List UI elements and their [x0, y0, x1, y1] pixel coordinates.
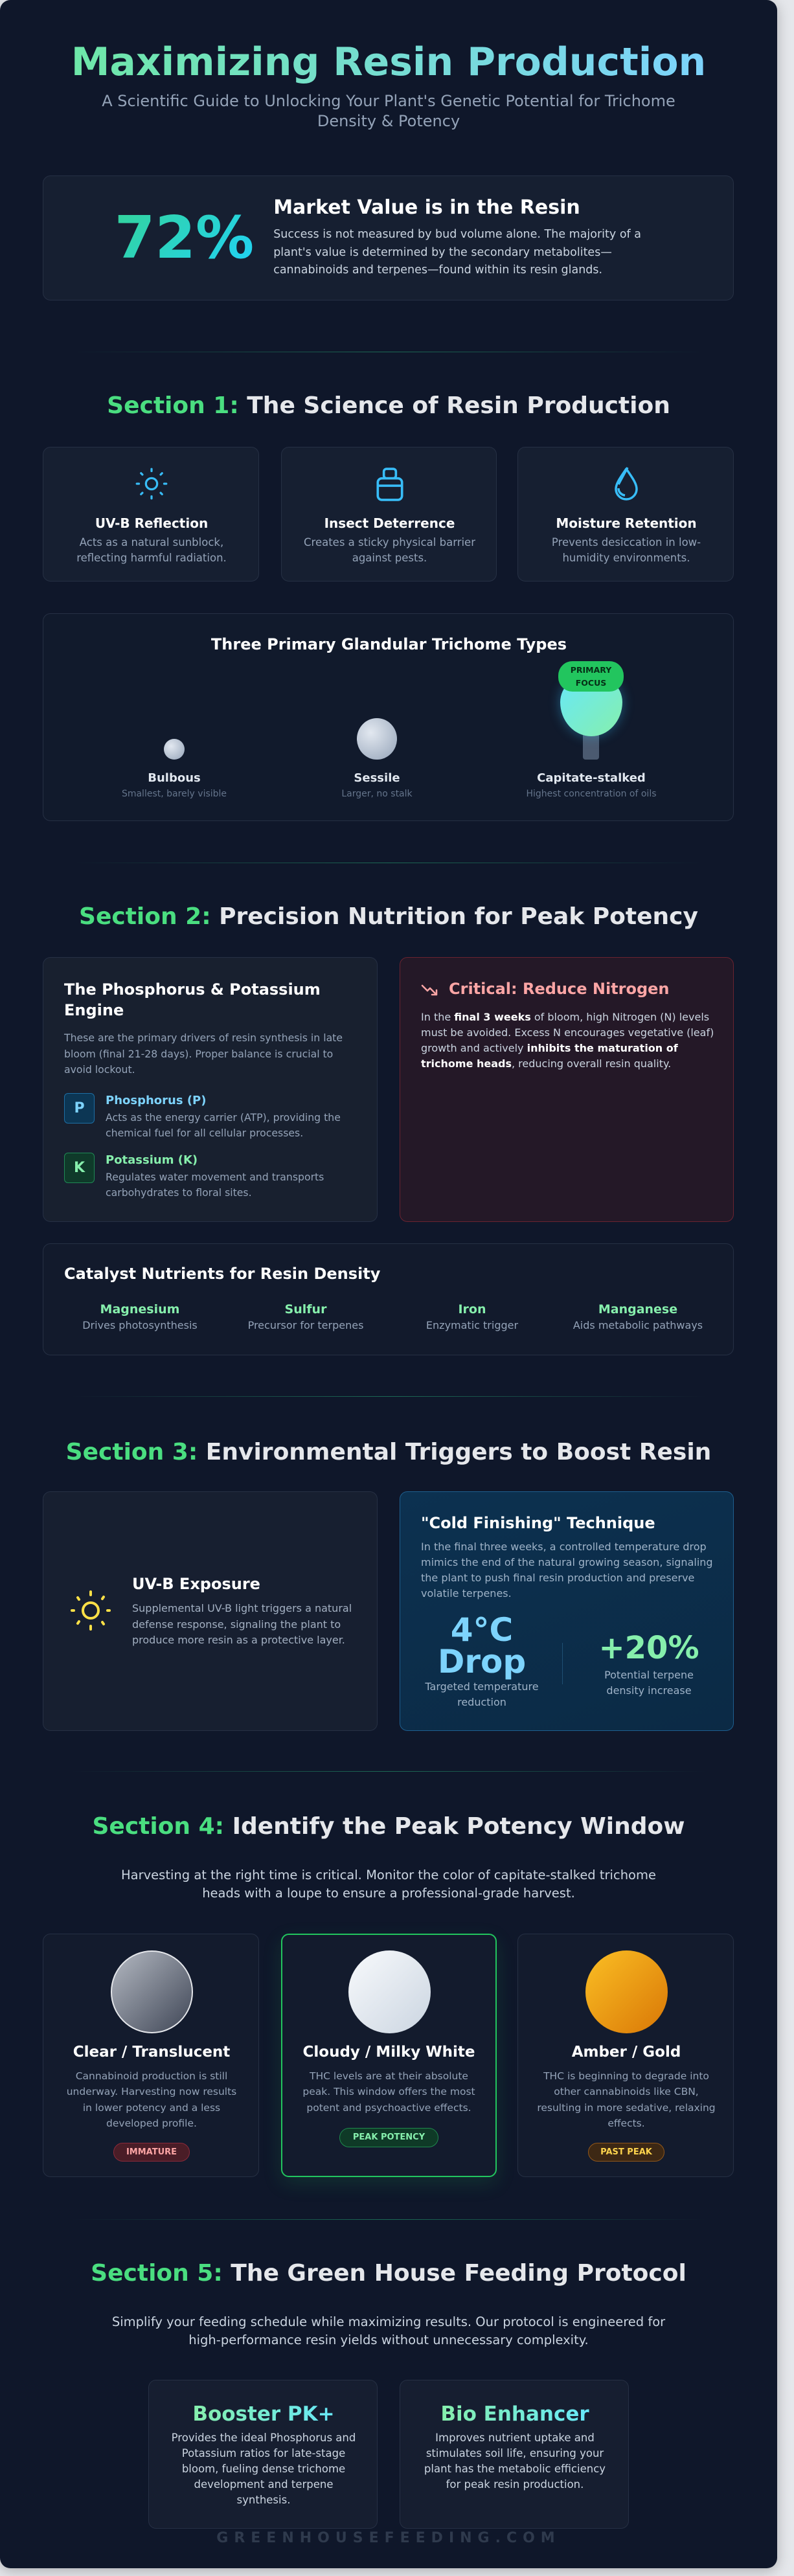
stat: +20%: Potential terpene density increase	[604, 1669, 694, 1697]
nutrient: potassium: Regulates water movement and transports carbohydrates to floral sites.	[106, 1171, 324, 1199]
nutrient: magnesium: Drives photosynthesis	[82, 1319, 198, 1331]
badge: primary focus: PRIMARY	[571, 665, 611, 675]
card: clear: Cannabinoid production is still underway. Harvesting now results in lower potency and a less developed profile.	[67, 2070, 236, 2129]
nutrient: sulfur: Precursor for terpenes	[248, 1319, 363, 1331]
heading: section 5: Section 5: The Green House Feeding Protocol	[91, 2260, 686, 2287]
badge: peak potency: PEAK POTENCY	[353, 2132, 425, 2142]
badge: primary focus: FOCUS	[576, 678, 606, 688]
badge: past peak: PAST PEAK	[600, 2147, 652, 2157]
stat: 72%: 72%	[115, 203, 254, 272]
card: UV-B reflection: UV-B Reflection	[95, 515, 208, 531]
stat: 4°C drop: Drop	[438, 1643, 526, 1680]
nutrient: sulfur: Sulfur	[285, 1302, 326, 1316]
heading: section 1: Section 1: The Science of Resin Production	[107, 392, 670, 419]
card: bio enhancer: Bio Enhancer	[440, 2402, 589, 2426]
trichome: sessile	[341, 718, 413, 799]
card: cloudy	[281, 1934, 497, 2177]
nutrient: iron: Enzymatic trigger	[426, 1319, 518, 1331]
panel: catalyst nutrients	[43, 1243, 734, 1355]
nutrient: iron: Iron	[458, 1302, 486, 1316]
nutrient: manganese: Manganese	[598, 1302, 677, 1316]
nutrient: phosphorus	[64, 1093, 341, 1139]
nutrient: manganese	[573, 1302, 703, 1331]
panel: trichome types	[43, 613, 734, 821]
icon: cloudy trichome	[348, 1950, 431, 2033]
panel: reduce nitrogen	[400, 957, 734, 1222]
nutrient: magnesium: Magnesium	[100, 1302, 179, 1316]
hero stat card	[43, 175, 734, 300]
card: amber: THC is beginning to degrade into other cannabinoids like CBN, resulting in more sedative, relaxing effects.	[537, 2070, 716, 2129]
intro text section 5: Simplify your feeding schedule while maximizing results. Our protocol is engineered for high-performance resin yields without unnecessary complexity.	[112, 2314, 665, 2347]
nutrient: iron	[426, 1302, 518, 1331]
card: moisture retention	[517, 447, 734, 582]
card: insect deterrence: Creates a sticky physical barrier against pests.	[304, 536, 475, 564]
trichome: sessile: Sessile	[354, 771, 400, 785]
heading: section 4: Section 4: Identify the Peak Potency Window	[92, 1813, 685, 1840]
trichome heading: Three Primary Glandular Trichome Types	[211, 635, 567, 653]
icon: sun	[136, 468, 167, 500]
intro text section 4: Harvesting at the right time is critical. Monitor the color of capitate-stalked trichome heads with a loupe to ensure a professional-grade harvest.	[121, 1868, 656, 1901]
trichome: bulbous: Bulbous	[148, 771, 201, 785]
nutrient: manganese: Aids metabolic pathways	[573, 1319, 703, 1331]
title: Maximizing Resin Production	[71, 40, 706, 85]
card: amber: Amber / Gold	[572, 2044, 681, 2061]
icon: jar	[377, 468, 403, 501]
hero text	[273, 196, 641, 277]
panel: cold finishing	[400, 1491, 734, 1731]
panel: cold finishing: In the final three weeks, a controlled temperature drop mimics the end of the natural growing season, signaling the plant to push final resin production and preserve volatile terpenes.	[421, 1541, 713, 1599]
panel: UV-B exposure	[43, 1491, 378, 1731]
card: UV-B reflection	[43, 447, 259, 582]
badge: immature: IMMATURE	[126, 2147, 177, 2157]
panel: cold finishing: "Cold Finishing" Technique	[421, 1514, 655, 1532]
badge: peak potency	[339, 2128, 438, 2147]
badge: immature	[113, 2143, 190, 2162]
card: insect deterrence: Insect Deterrence	[324, 515, 455, 531]
icon: trending down	[421, 984, 438, 996]
card: booster PK+: Booster PK+	[192, 2402, 335, 2426]
card: bio enhancer	[400, 2380, 629, 2529]
card: cloudy: THC levels are at their absolute peak. This window offers the most potent and psychoactive effects.	[302, 2070, 475, 2114]
hero text: Success is not measured by bud volume alone. The majority of a plant's value is determined by the secondary metabolites—cannabinoids and terpenes—found within its resin glands.	[273, 228, 641, 277]
trichome: capitate-stalked	[526, 661, 657, 799]
icon: sun yellow	[71, 1590, 111, 1631]
trichome: bulbous	[122, 739, 227, 799]
card: moisture retention: Prevents desiccation in low-humidity environments.	[552, 536, 701, 564]
panel: UV-B exposure: UV-B Exposure	[132, 1575, 260, 1593]
heading: section 3: Section 3: Environmental Triggers to Boost Resin	[66, 1439, 711, 1465]
panel: catalyst nutrients: Catalyst Nutrients for Resin Density	[64, 1265, 380, 1283]
card: UV-B reflection: Acts as a natural sunblock, reflecting harmful radiation.	[76, 536, 227, 564]
nutrient: sulfur	[248, 1302, 363, 1331]
card: cloudy: Cloudy / Milky White	[303, 2044, 475, 2061]
heading: section 2: Section 2: Precision Nutrition for Peak Potency	[79, 903, 698, 930]
hero text: Market Value is in the Resin	[273, 196, 580, 219]
nutrient: potassium	[64, 1153, 324, 1199]
card: booster PK+: Provides the ideal Phosphorus and Potassium ratios for late-stage bloom, fueling dense trichome development and terpene synthesis.	[172, 2432, 356, 2506]
panel: P&K engine	[43, 957, 378, 1222]
card: amber	[517, 1934, 734, 2177]
icon: droplet	[615, 467, 638, 501]
trichome: sessile: Larger, no stalk	[341, 789, 413, 799]
nutrient: phosphorus: Phosphorus (P)	[106, 1094, 206, 1107]
icon: clear trichome	[111, 1950, 193, 2033]
nutrient: potassium: Potassium (K)	[106, 1153, 198, 1167]
stat: 4°C drop	[425, 1611, 539, 1708]
card: clear: Clear / Translucent	[73, 2044, 230, 2061]
subtitle: A Scientific Guide to Unlocking Your Plant's Genetic Potential for Trichome Density & Potency	[102, 92, 675, 130]
stat: 4°C drop: Targeted temperature reduction	[425, 1680, 539, 1708]
badge: primary focus	[558, 661, 624, 692]
trichome: capitate-stalked: Highest concentration of oils	[526, 789, 657, 799]
card: moisture retention: Moisture Retention	[556, 515, 697, 531]
panel: P&K engine: These are the primary drivers of resin synthesis in late bloom (final 21-28 days). Proper balance is crucial to avoid lockout.	[64, 1032, 343, 1076]
panel: reduce nitrogen: In the final 3 weeks of bloom, high Nitrogen (N) levels must be avoided. Excess N encourages vegetative (leaf) growth and actively inhibits the maturation of trichome heads, reducing overall resin quality.	[421, 1011, 714, 1070]
panel: P&K engine: The Phosphorus & Potassium Engine	[64, 980, 321, 1019]
nutrient: potassium: K	[74, 1160, 85, 1176]
trichome: capitate-stalked: Capitate-stalked	[537, 771, 646, 785]
card: booster PK+	[148, 2380, 378, 2529]
nutrient: phosphorus: P	[74, 1100, 85, 1116]
nutrient: magnesium	[82, 1302, 198, 1331]
stat: 4°C drop: 4°C	[451, 1611, 513, 1649]
icon: amber trichome	[585, 1950, 668, 2033]
nutrient: phosphorus: Acts as the energy carrier (ATP), providing the chemical fuel for all cellular processes.	[106, 1111, 341, 1139]
panel: UV-B exposure: Supplemental UV-B light triggers a natural defense response, signaling the plant to produce more resin as a protective layer.	[132, 1602, 352, 1646]
panel: reduce nitrogen: Critical: Reduce Nitrogen	[449, 980, 670, 998]
footer brand: GREENHOUSEFEEDING.COM	[216, 2530, 561, 2546]
trichome: bulbous: Smallest, barely visible	[122, 789, 227, 799]
card: bio enhancer: Improves nutrient uptake and stimulates soil life, ensuring your plant has the metabolic efficiency for peak resin production.	[424, 2432, 606, 2491]
card: insect deterrence	[281, 447, 497, 582]
card: clear	[43, 1934, 259, 2177]
stat: +20%: +20%	[598, 1630, 699, 1666]
stat: +20%	[598, 1630, 699, 1697]
badge: past peak	[588, 2143, 664, 2162]
